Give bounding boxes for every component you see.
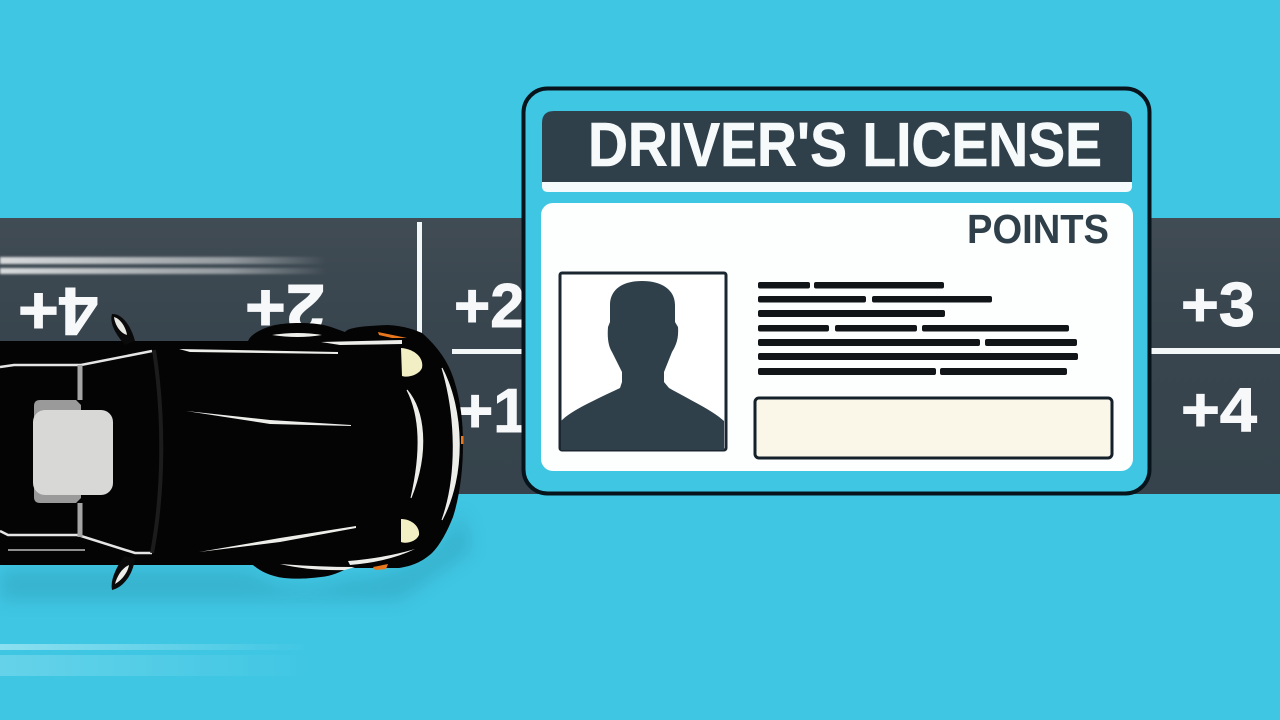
driver's license card [524, 88, 1150, 494]
text lines [758, 282, 1078, 375]
road points: +2: +2 [454, 272, 525, 341]
headlight bottom [401, 519, 419, 543]
mirror glint bottom [115, 565, 129, 584]
roof window [33, 410, 113, 495]
header white stripe [542, 182, 1132, 192]
headlight top [401, 348, 422, 377]
speed streak: lower [0, 644, 310, 676]
speed streak: road [0, 257, 326, 274]
photo with silhouette [560, 273, 726, 450]
car wing mirror bottom [112, 556, 135, 590]
road points: +1: +1 [457, 377, 528, 446]
car body [0, 323, 463, 579]
road band [0, 218, 1280, 494]
signature box [755, 398, 1112, 458]
header bar [542, 111, 1132, 182]
bonnet highlights [179, 333, 459, 570]
road points: +3: +3 [1181, 271, 1255, 340]
points label: POINTS [967, 206, 1109, 252]
road points: upside-down +2: 2+ [245, 270, 325, 346]
title: DRIVER'S LICENSE [588, 111, 1102, 180]
car shadow [0, 510, 472, 600]
mirror glint top [114, 317, 127, 335]
indicator lights [373, 332, 464, 570]
roof window surround [34, 400, 81, 503]
road lane markings [417, 222, 1280, 354]
car [0, 314, 464, 590]
road points: +4: +4 [1181, 376, 1258, 445]
white panel [541, 203, 1133, 471]
car wing mirror top [111, 314, 135, 345]
card frame [524, 88, 1150, 494]
window frame lines [0, 350, 161, 553]
road points: upside-down +4: 4+ [18, 273, 98, 349]
